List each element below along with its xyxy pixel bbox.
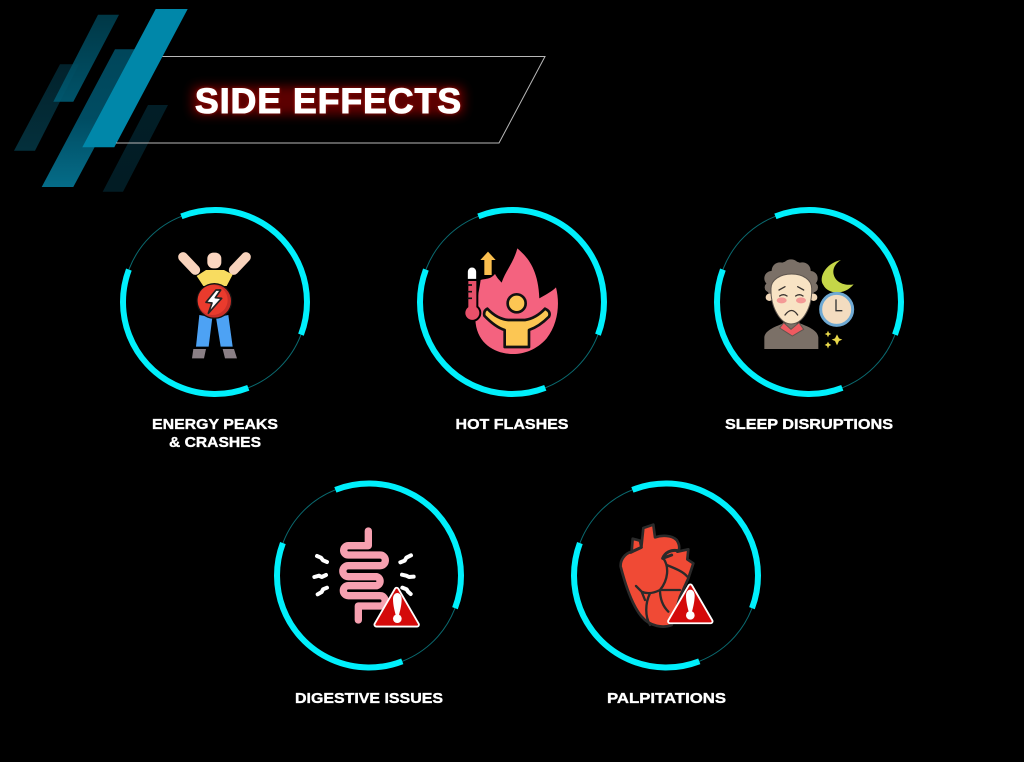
icon: heart with warning (621, 525, 711, 627)
panel: hot flashes (393, 183, 631, 433)
panel: energy peaks and crashes (96, 183, 334, 451)
icon: person in flame with thermometer (464, 248, 558, 354)
panel: palpitations (547, 457, 785, 707)
title: SIDE EFFECTS (195, 81, 461, 121)
icon: energetic person (183, 253, 246, 358)
label line 2: & CRASHES (169, 435, 261, 451)
panel: sleep disruptions (690, 183, 928, 433)
panel: digestive issues (250, 457, 488, 707)
label: SLEEP DISRUPTIONS (725, 417, 893, 433)
label: DIGESTIVE ISSUES (295, 691, 443, 707)
label: ENERGY PEAKS (152, 417, 278, 433)
label: HOT FLASHES (456, 417, 569, 433)
label: PALPITATIONS (607, 691, 726, 707)
warning triangle (670, 586, 711, 621)
icon: intestines with warning (314, 531, 417, 625)
title banner (116, 56, 545, 143)
icon: tired person, moon and clock (764, 259, 854, 349)
title glow (192, 86, 464, 115)
header: slanted decorative bars (14, 9, 188, 192)
